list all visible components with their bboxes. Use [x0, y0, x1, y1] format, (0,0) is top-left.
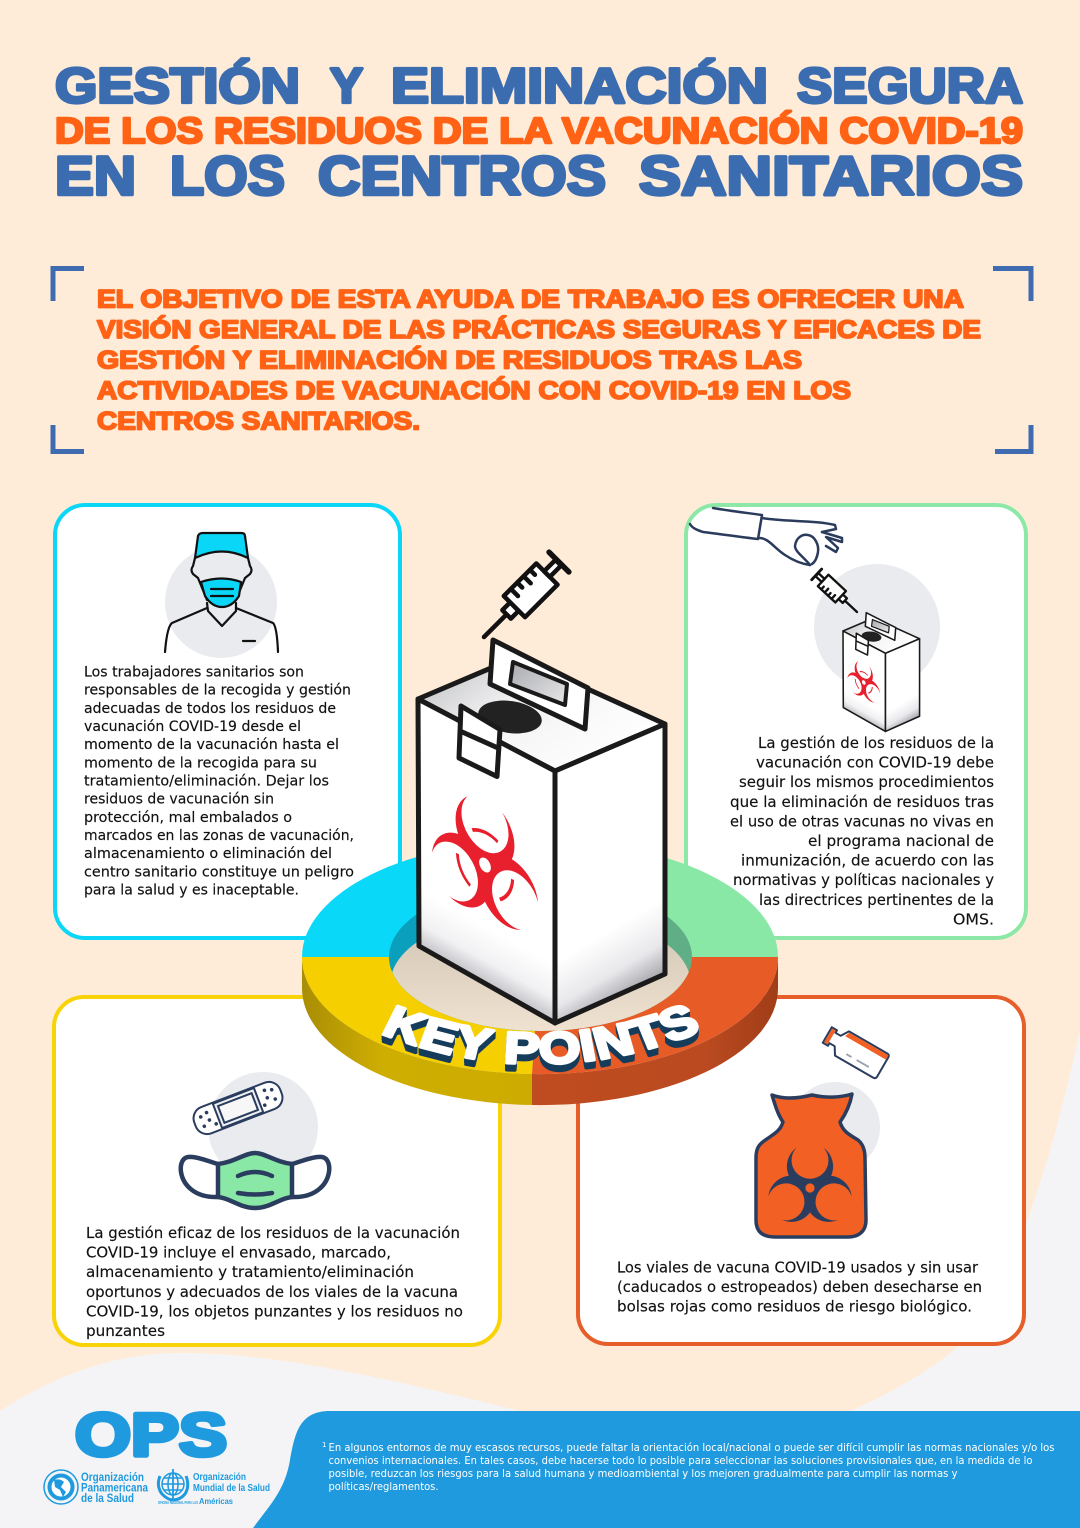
panel frame cyan	[55, 505, 400, 938]
text: effective management: COVID-19 incluye el envasado, marcado,	[86, 1244, 391, 1262]
text: effective management: punzantes	[86, 1322, 165, 1340]
key points label: KEY POINTS	[382, 1004, 699, 1072]
text: Organización Mundial de la Salud Américas: OFICINA REGIONAL PARA LAS	[158, 1500, 198, 1505]
text: health workers: para la salud y es inaceptable.	[84, 882, 299, 898]
objective text: CENTROS SANITARIOS.	[97, 408, 420, 436]
text: waste procedures	[730, 734, 994, 928]
text: Organización Panamericana de la Salud: Organización	[81, 1472, 144, 1484]
text: effective management	[86, 1224, 463, 1340]
text: waste procedures: que la eliminación de residuos tras	[730, 793, 994, 811]
text: health workers: adecuadas de todos los residuos de	[84, 700, 336, 717]
title line 1: GESTIÓN	[55, 58, 300, 114]
platform side	[302, 957, 778, 1105]
text: Organización Panamericana de la Salud: Panamericana	[81, 1482, 149, 1494]
objective text: VISIÓN GENERAL DE LAS PRÁCTICAS SEGURAS Y EFICACES DE	[97, 314, 981, 344]
text: waste procedures: el uso de otras vacunas no vivas en	[730, 812, 994, 830]
title line 3: LOS	[170, 146, 285, 206]
footnote text	[322, 1441, 1054, 1493]
background grey curve	[0, 1030, 1080, 1528]
icon: bandage and face mask	[181, 1072, 329, 1208]
panel: waste procedures	[686, 505, 1026, 938]
objective text: EL OBJETIVO DE ESTA AYUDA DE TRABAJO ES OFRECER UNA	[97, 286, 964, 314]
footnote text: En algunos entornos de muy escasos recursos, puede faltar la orientación local/nacional o puede ser difícil cumplir las normas nacionales y/o los	[328, 1442, 1054, 1454]
text: health workers: marcados en las zonas de vacunación,	[84, 827, 354, 844]
panel: vials	[578, 997, 1024, 1344]
panel frame orange	[578, 997, 1024, 1344]
text: waste procedures: las directrices pertinentes de la	[759, 891, 994, 909]
icon: vial and biohazard bag	[756, 1023, 890, 1237]
text: health workers: protección, mal embalados o	[84, 809, 292, 826]
title	[55, 58, 1023, 206]
title line 1: ELIMINACIÓN	[391, 58, 768, 114]
title line 3: EN	[55, 146, 136, 206]
title line 3: SANITARIOS	[639, 146, 1023, 206]
platform hole	[389, 914, 692, 1031]
panel frame yellow	[54, 997, 500, 1345]
text: effective management: La gestión eficaz de los residuos de la vacunación	[86, 1224, 460, 1242]
text: waste procedures: OMS.	[953, 910, 994, 928]
text: effective management: COVID-19, los objetos punzantes y los residuos no	[86, 1302, 463, 1320]
text: vials: Los viales de vacuna COVID-19 usados y sin usar	[617, 1258, 979, 1276]
text: health workers: momento de la recogida para su	[84, 754, 317, 771]
bracket frame	[53, 268, 1031, 452]
text: waste procedures: La gestión de los residuos de la	[758, 734, 994, 752]
icon: health worker	[165, 533, 278, 658]
text: waste procedures: seguir los mismos procedimientos	[739, 773, 994, 791]
OPS wordmark: OPS	[75, 1402, 227, 1468]
panel: effective management	[54, 997, 500, 1345]
logo: OPS	[44, 1402, 270, 1506]
objective text: GESTIÓN Y ELIMINACIÓN DE RESIDUOS TRAS LAS	[97, 344, 802, 374]
footnote text: 1	[322, 1441, 326, 1449]
key points platform	[302, 840, 778, 1105]
text: health workers: tratamiento/eliminación. Dejar los	[84, 772, 329, 790]
text: waste procedures: normativas y políticas nacionales y	[733, 871, 994, 889]
text: health workers: Los trabajadores sanitarios son	[84, 664, 304, 680]
text: vials	[617, 1258, 982, 1316]
emblem: WHO	[158, 1469, 188, 1500]
icon: syringe above box	[473, 551, 570, 648]
text: waste procedures: vacunación con COVID-19 debe	[756, 754, 994, 772]
platform top quadrants	[302, 840, 778, 1074]
text: Organización Mundial de la Salud Américas: Mundial de la Salud	[193, 1482, 270, 1494]
text: waste procedures: inmunización, de acuerdo con las	[741, 852, 994, 870]
icon: hand dropping syringe into box	[690, 508, 940, 731]
title line 2: DE LOS RESIDUOS DE LA VACUNACIÓN COVID-19	[55, 109, 1023, 151]
footnote text: políticas/reglamentos.	[328, 1481, 438, 1493]
text: Organización Mundial de la Salud Américas	[158, 1471, 270, 1506]
footnote text: convenios internacionales. En tales casos, debe hacerse todo lo posible para seleccionar las soluciones provisionales que, en la medida de lo	[328, 1455, 1032, 1467]
text: vials: (caducados o estropeados) deben desecharse en	[617, 1278, 982, 1296]
footnote text: posible, reduzcan los riesgos para la salud humana y medioambiental y los mejoren gradualmente para cumplir las normas y	[328, 1468, 958, 1480]
text: vials: bolsas rojas como residuos de riesgo biológico.	[617, 1298, 972, 1316]
text: Organización Panamericana de la Salud	[81, 1472, 149, 1505]
text: health workers: momento de la vacunación hasta el	[84, 736, 339, 753]
text: health workers	[84, 664, 354, 898]
text: Organización Panamericana de la Salud: de la Salud	[81, 1493, 134, 1505]
title line 1: SEGURA	[797, 58, 1023, 114]
title line 3	[55, 146, 1023, 206]
text: health workers: vacunación COVID-19 desde el	[84, 718, 301, 735]
text: Organización Mundial de la Salud Américas: Américas	[199, 1496, 233, 1506]
title line 1: Y	[330, 58, 363, 114]
title line 1	[55, 58, 1023, 114]
text: health workers: centro sanitario constituye un peligro	[84, 863, 354, 880]
text: health workers: almacenamiento o eliminación del	[84, 845, 332, 862]
objective text	[97, 286, 981, 436]
emblem: PAHO	[44, 1470, 78, 1504]
objective text: ACTIVIDADES DE VACUNACIÓN CON COVID-19 EN LOS	[97, 375, 851, 405]
text: Organización Mundial de la Salud Américas: Organización	[193, 1471, 246, 1483]
text: health workers: responsables de la recogida y gestión	[84, 682, 351, 699]
title line 3: CENTROS	[318, 146, 606, 206]
panel frame green	[686, 505, 1026, 938]
panel: health workers	[55, 505, 400, 938]
footer: blue note panel	[253, 1411, 1080, 1528]
sharps box with biohazard	[418, 640, 665, 1023]
text: effective management: almacenamiento y tratamiento/eliminación	[86, 1263, 414, 1281]
text: health workers: residuos de vacunación sin	[84, 791, 274, 808]
text: waste procedures: el programa nacional de	[808, 832, 994, 850]
text: effective management: oportunos y adecuados de los viales de la vacuna	[86, 1283, 458, 1301]
